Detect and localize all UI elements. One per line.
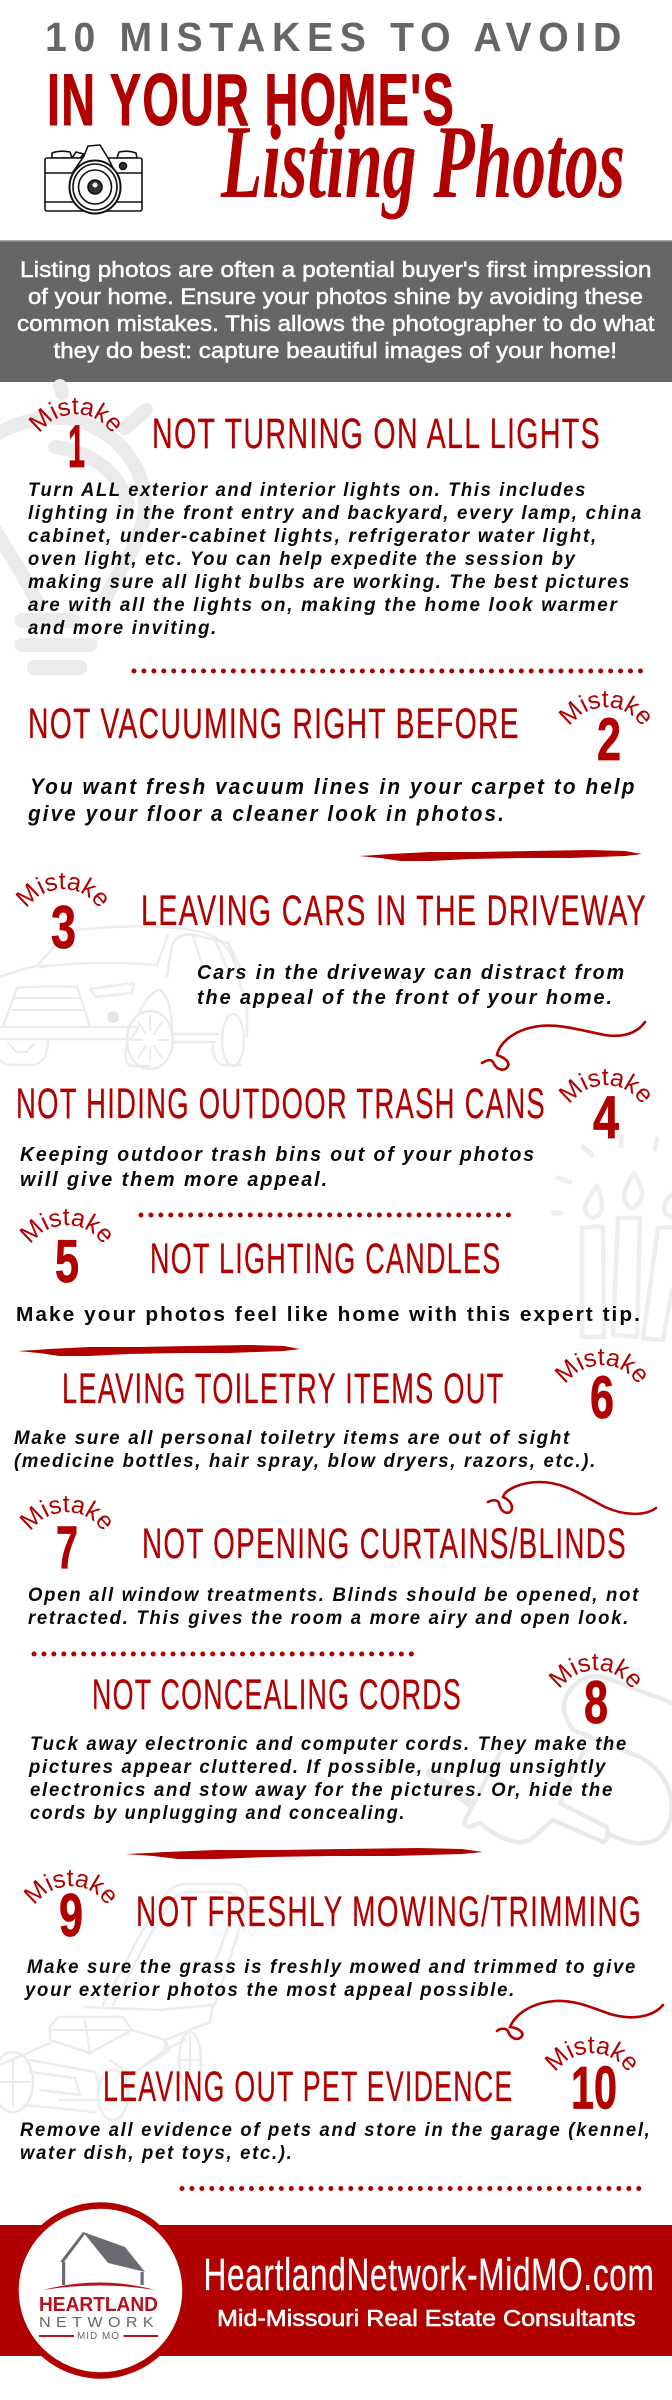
- badge 2: Mistake: [558, 691, 650, 725]
- body 10: Remove all evidence of pets and store in the garage (kennel,: [20, 2119, 652, 2141]
- watermark: car: [0, 926, 247, 1069]
- badge 8: 8: [584, 1669, 608, 1736]
- badge 1: Mistake: [28, 398, 120, 432]
- badge 7: [19, 1496, 111, 1581]
- title: [45, 14, 628, 220]
- badge 7: 7: [56, 1514, 78, 1581]
- body 8: Tuck away electronic and computer cords. They make the: [30, 1733, 628, 1755]
- panel: mistake 5 candles watermark: [553, 1137, 672, 1340]
- body 1: lighting in the front entry and backyard, every lamp, china: [28, 502, 643, 524]
- swirl divider 1: [482, 1022, 645, 1070]
- badge 1: 1: [68, 413, 85, 480]
- title line: 10 mistakes to avoid: 10 MISTAKES TO AVOID: [45, 14, 628, 60]
- body 4: will give them more appeal.: [20, 1168, 329, 1191]
- body 1: cabinet, under-cabinet lights, refrigerator water light,: [28, 525, 598, 547]
- body 9: Make sure the grass is freshly mowed and trimmed to give: [27, 1956, 637, 1978]
- badge 10: Mistake: [544, 2037, 636, 2071]
- badge 9: 9: [59, 1882, 83, 1949]
- badge 8: Mistake: [548, 1654, 640, 1688]
- badge 2: 2: [597, 706, 621, 773]
- body 3: [197, 961, 626, 1009]
- panel: mistake 10: [20, 2037, 652, 2164]
- badge 9: [23, 1870, 115, 1949]
- body 9: [24, 1956, 637, 2001]
- logo text: HEARTLAND: [39, 2294, 158, 2316]
- icon: house: [43, 2232, 155, 2290]
- badge 4: [558, 1069, 650, 1151]
- tagline: Mid-Missouri Real Estate Consultants: [217, 2305, 636, 2331]
- body 1: oven light, etc. You can help expedite the session by: [28, 548, 576, 570]
- body 5: Make your photos feel like home with this expert tip.: [16, 1303, 642, 1326]
- badge 3: 3: [51, 894, 76, 961]
- title line: in your home's: IN YOUR HOME'S: [47, 60, 455, 141]
- intro text: [17, 257, 654, 363]
- panel: mistake 7: [19, 1496, 640, 1629]
- badge 10: 10: [571, 2054, 617, 2122]
- panel: mistake 9: [0, 1870, 642, 2122]
- body 8: cords by unplugging and concealing.: [30, 1802, 406, 1824]
- logo text: NETWORK: [39, 2314, 159, 2331]
- watermark: light bulb: [0, 386, 146, 675]
- badge 4: 4: [593, 1084, 619, 1151]
- watermark: plug: [430, 1676, 672, 1843]
- body 2: give your floor a cleaner look in photos.: [27, 801, 506, 826]
- badge 8: [548, 1654, 640, 1736]
- badge 4: Mistake: [558, 1069, 650, 1103]
- panel: mistake 4: [16, 1069, 650, 1191]
- intro text: common mistakes. This allows the photographer to do what: [17, 311, 654, 336]
- brush stroke divider 1: [359, 850, 642, 861]
- intro text: of your home. Ensure your photos shine by avoiding these: [28, 284, 643, 309]
- panel: mistake 5: [16, 1209, 642, 1326]
- logo text: [39, 2294, 159, 2342]
- body 4: [20, 1143, 536, 1191]
- badge 6: [554, 1349, 646, 1431]
- logo: [16, 2206, 186, 2376]
- badge 3: [15, 873, 107, 961]
- body 1: making sure all light bulbs are working. The best pictures: [28, 571, 631, 593]
- badge 3: Mistake: [15, 873, 107, 907]
- panel: mistake 1: [0, 379, 643, 675]
- footer band: [0, 2225, 672, 2356]
- body 6: (medicine bottles, hair spray, blow dryers, razors, etc.).: [14, 1450, 597, 1472]
- body 8: electronics and stow away for the pictures. Or, hide the: [30, 1779, 614, 1801]
- badge 6: Mistake: [554, 1349, 646, 1383]
- panel: mistake 2: [27, 691, 650, 826]
- body 4: Keeping outdoor trash bins out of your photos: [20, 1143, 536, 1166]
- body 1: and more inviting.: [28, 617, 218, 639]
- body 8: [28, 1733, 628, 1824]
- body 9: your exterior photos the most appeal possible.: [24, 1979, 516, 2001]
- badge 6: 6: [590, 1364, 614, 1431]
- watermark: lawn mower: [0, 1884, 248, 2120]
- panel: mistake 8: [28, 1654, 672, 1846]
- intro panel: [0, 240, 672, 382]
- body 2: You want fresh vacuum lines in your carpet to help: [30, 774, 636, 799]
- body 2: [27, 774, 637, 826]
- badge 10: [544, 2037, 636, 2122]
- body 8: pictures appear cluttered. If possible, unplug unsightly: [28, 1756, 607, 1778]
- body 3: the appeal of the front of your home.: [197, 986, 614, 1009]
- brush stroke divider 2: [18, 1345, 300, 1356]
- badge 9: Mistake: [23, 1870, 115, 1904]
- heading 8: NOT CONCEALING CORDS: [92, 1671, 462, 1719]
- swirl divider 2: [488, 1482, 656, 1514]
- body 6: Make sure all personal toiletry items are out of sight: [14, 1427, 571, 1449]
- swirl divider 3: [497, 2001, 663, 2039]
- badge 5: 5: [55, 1228, 79, 1295]
- badge 1: [28, 398, 120, 480]
- badge 5: [19, 1209, 111, 1295]
- body 3: Cars in the driveway can distract from: [197, 961, 626, 984]
- intro text: they do best: capture beautiful images of your home!: [54, 338, 617, 363]
- body 7: [28, 1584, 640, 1629]
- body 10: water dish, pet toys, etc.).: [20, 2142, 294, 2164]
- body 1: Turn ALL exterior and interior lights on. This includes: [28, 479, 587, 501]
- body 7: Open all window treatments. Blinds should be opened, not: [28, 1584, 640, 1606]
- intro text: Listing photos are often a potential buyer's first impression: [20, 257, 652, 282]
- body 10: [20, 2119, 652, 2164]
- logo text: MID MO: [77, 2331, 120, 2342]
- body 1: [28, 479, 643, 639]
- body 1: are with all the lights on, making the home look warmer: [28, 594, 618, 616]
- icon: camera: [45, 145, 142, 214]
- badge 7: Mistake: [19, 1496, 111, 1530]
- brush stroke divider 3: [126, 1848, 483, 1859]
- panel: mistake 6: [14, 1349, 646, 1472]
- body 7: retracted. This gives the room a more airy and open look.: [28, 1607, 630, 1629]
- badge 5: Mistake: [19, 1209, 111, 1243]
- body 6: [14, 1427, 597, 1472]
- badge 2: [558, 691, 650, 773]
- panel: mistake 3: [0, 873, 647, 1070]
